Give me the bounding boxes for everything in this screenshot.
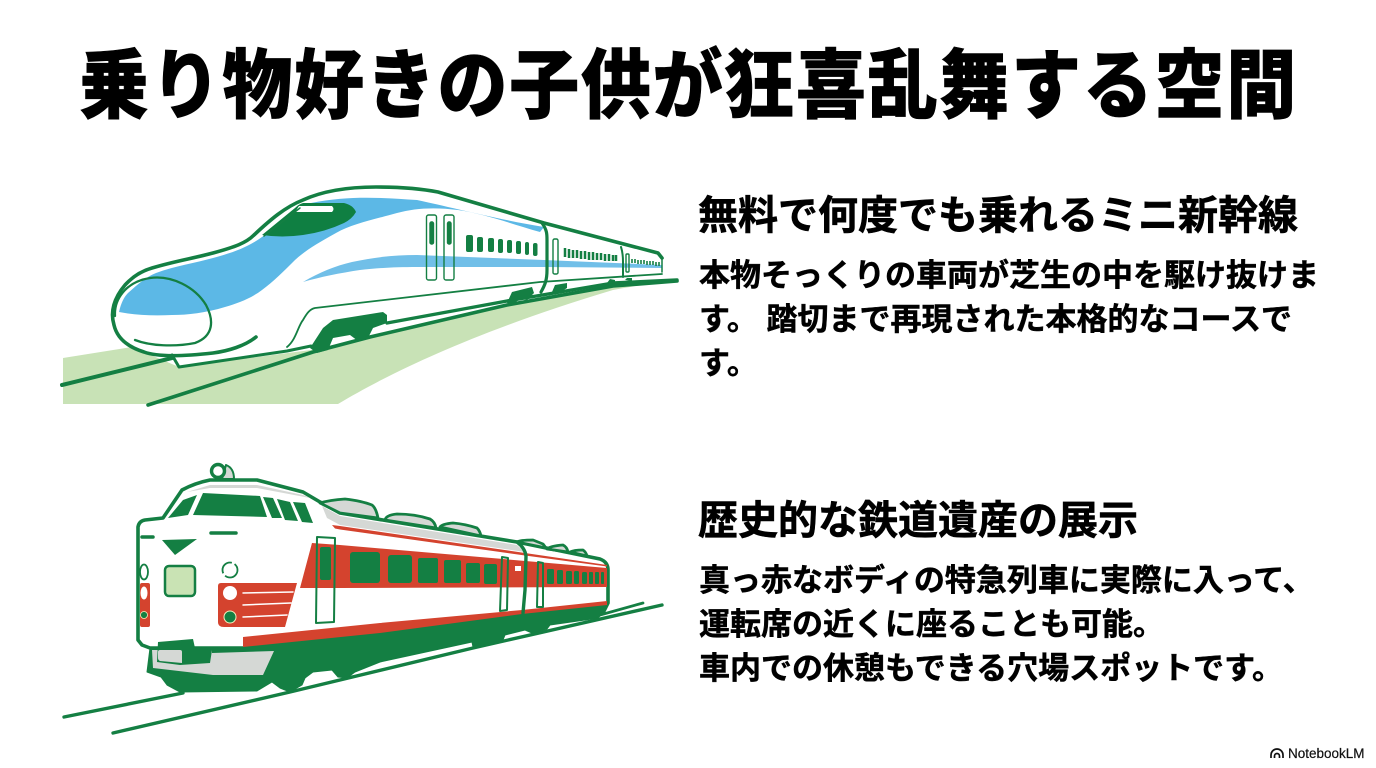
red lower stripe — [243, 601, 607, 647]
windshield — [262, 203, 356, 236]
heading: railway heritage: 歴史的な鉄道遺産の展示 — [698, 499, 1138, 543]
windows: rear cars — [565, 248, 659, 266]
text: railway heritage description: 真っ赤なボディの特急列車に実際に入って、 — [699, 563, 1314, 598]
train outline — [112, 187, 662, 367]
text: railway heritage description — [699, 563, 1314, 686]
doors — [426, 215, 629, 280]
rails — [64, 603, 662, 733]
heading: mini shinkansen: 無料で何度でも乗れるミニ新幹線 — [698, 194, 1298, 238]
text: railway heritage description: 運転席の近くに座ることも可能。 — [699, 607, 1164, 642]
lamp rings — [140, 562, 238, 580]
text: railway heritage description: 車内での休憩もできる穴場スポットです。 — [699, 651, 1283, 686]
chevron and dashes — [142, 533, 236, 555]
body — [138, 480, 608, 648]
green underbody — [147, 604, 607, 692]
doors — [316, 537, 543, 623]
blue roof and nose — [119, 198, 544, 315]
cab roof strip — [187, 485, 310, 498]
ring on roof — [212, 464, 234, 479]
watermark: NotebookLM — [1270, 746, 1365, 761]
red window band — [300, 543, 607, 588]
rails — [62, 280, 677, 405]
text: mini shinkansen description: 本物そっくりの車両が芝生の中を駆け抜けま — [699, 258, 1319, 293]
headlight square — [165, 566, 195, 596]
ground: grass — [63, 281, 677, 404]
windows: first car — [466, 235, 538, 256]
side windows — [320, 547, 604, 584]
bogies — [310, 278, 632, 353]
roof units — [320, 499, 587, 556]
blue side stripe — [303, 255, 662, 282]
text: mini shinkansen description: す。 — [699, 346, 758, 381]
text: NotebookLM: NotebookLM — [1288, 746, 1365, 761]
nose oval — [115, 278, 211, 345]
small white window — [515, 566, 521, 571]
red front panel — [218, 583, 297, 627]
icon: NotebookLM logo — [1270, 748, 1284, 758]
car gap — [517, 542, 526, 613]
roof stripe — [322, 506, 607, 566]
cab windows — [168, 493, 313, 523]
red left panel — [140, 583, 150, 627]
train body — [112, 187, 662, 367]
text: mini shinkansen description: す。 踏切まで再現された本格的なコースで — [699, 302, 1292, 337]
cab skirt — [152, 639, 274, 675]
title: 乗り物好きの子供が狂喜乱舞する空間 — [79, 44, 1298, 128]
text: mini shinkansen description — [699, 258, 1319, 381]
